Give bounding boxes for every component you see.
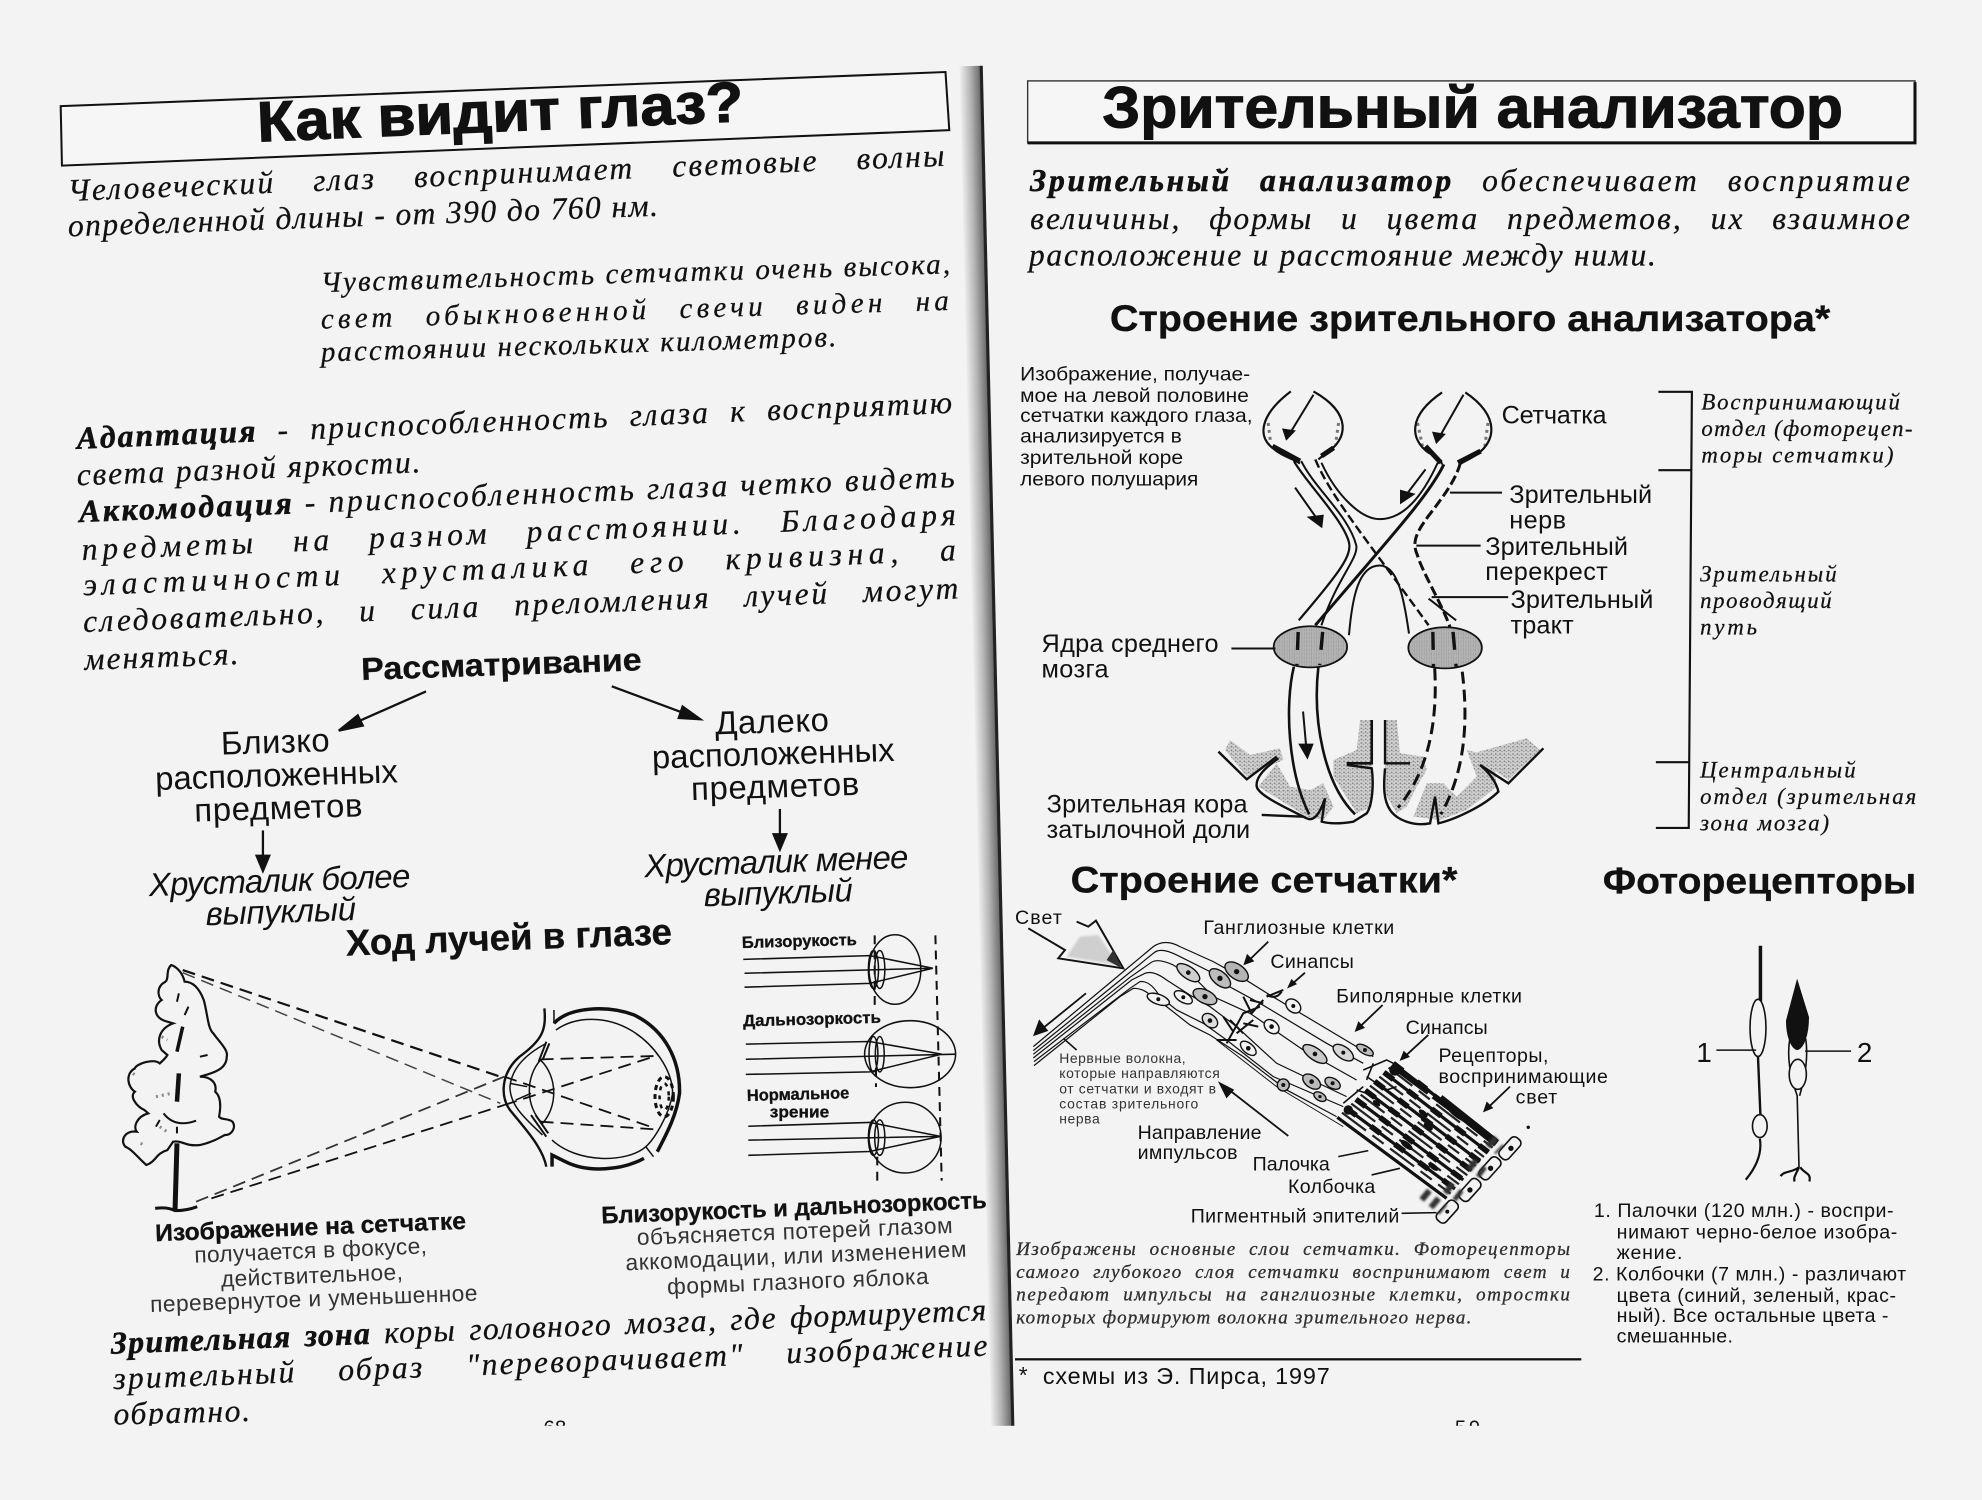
text: lens less convex: Хрусталик менее <box>643 838 909 884</box>
text: near objects <box>155 721 399 829</box>
retina and lens guide lines <box>875 935 942 1181</box>
bottom page edge mask <box>0 1426 1982 1500</box>
labels: optic pathway: Ядра среднего <box>1042 630 1219 658</box>
icon: eye cross section <box>504 1008 680 1169</box>
diagram: rays from tree to eye <box>183 970 655 1202</box>
text block: retinal image: Изображение на сетчатке <box>155 1208 466 1247</box>
caption: retina layers: самого глубокого слоя сетчатки воспринимают свет и <box>1016 1262 1570 1283</box>
text block: adaptation and accommodation: Адаптация - приспособленность глаза к восприятию <box>74 385 953 456</box>
direction arrows <box>1295 469 1426 753</box>
diagram: optic pathway <box>1231 391 1508 814</box>
dark blobs <box>1344 1064 1469 1172</box>
text block: retina sensitivity: свет обыкновенной свечи виден на <box>320 285 949 336</box>
labels: optic pathway <box>1042 401 1653 844</box>
labels: retina: Колбочка <box>1288 1176 1375 1198</box>
leader lines <box>1231 493 1508 648</box>
text block: analyzer definition: Зрительный анализатор обеспечивает восприятие <box>1029 163 1910 198</box>
text block: adaptation and accommodation: эластичности хрусталика его кривизна, а <box>82 532 956 602</box>
labels: optic pathway: Зрительный <box>1511 586 1653 614</box>
labels: retina <box>1015 907 1608 1227</box>
labels: vision types: Близорукость <box>742 931 857 952</box>
text block: retina sensitivity: расстоянии нескольких километров. <box>318 321 837 369</box>
arrow: to near objects <box>339 691 426 731</box>
text: lens more convex: Хрусталик более <box>147 857 411 903</box>
text block: visual cortex: зрительный образ "переворачивает" изображение <box>112 1328 988 1396</box>
lower tracts <box>1289 667 1355 814</box>
heading: retina structure: Строение сетчатки* <box>1071 858 1458 900</box>
labels: rod and cone numbers: 2 <box>1857 1037 1872 1068</box>
text block: visual cortex <box>109 1292 988 1432</box>
text block: retina sensitivity <box>318 248 950 369</box>
footnote: схемы из Э. Пирса, 1997 <box>1043 1363 1330 1389</box>
heading: analyzer structure: Строение зрительного анализатора* <box>1110 298 1831 339</box>
note: left half of retina: анализируется в <box>1020 425 1182 447</box>
caption: retina layers <box>1015 1239 1570 1328</box>
caption: retina layers: Изображены основные слои сетчатки. Фоторецепторы <box>1015 1239 1570 1260</box>
list: photoreceptor descriptions: цвета (синий, зеленый, крас- <box>1617 1285 1896 1307</box>
heading: path of rays: Ход лучей в глазе <box>345 911 673 964</box>
note: left half of retina: зрительной коре <box>1020 447 1183 469</box>
labels: retina: Биполярные клетки <box>1336 985 1522 1007</box>
icon: tree <box>123 965 234 1211</box>
text block: adaptation and accommodation <box>74 385 959 677</box>
labels: retina: которые направляются <box>1059 1065 1220 1081</box>
labels: retina: Направление <box>1138 1122 1262 1144</box>
text: far objects <box>651 701 896 807</box>
footnote rule <box>1015 1358 1581 1360</box>
text: lens less convex: выпуклый <box>703 871 853 913</box>
text block: adaptation and accommodation: следовательно, и сила преломления лучей могут <box>82 570 959 639</box>
text block: myopia and hyperopia explained: формы глазного яблока <box>667 1263 929 1299</box>
labels: retina: нерва <box>1059 1111 1100 1127</box>
text block: visual cortex: обратно. <box>113 1393 250 1432</box>
receptor rods <box>1337 1063 1497 1198</box>
labels: analyzer sections: Зрительный <box>1700 561 1837 586</box>
labels: optic pathway: затылочной доли <box>1047 816 1250 844</box>
labels: vision types: Нормальное <box>747 1084 850 1105</box>
labels: retina: Пигментный эпителий <box>1191 1205 1399 1227</box>
list: photoreceptor descriptions: 2. Колбочки (7 млн.) - различают <box>1593 1263 1906 1285</box>
labels: analyzer sections: Воспринимающий <box>1701 390 1900 415</box>
text block: retinal image: действительное, <box>220 1258 403 1292</box>
labels: analyzer sections: отдел (фоторецеп- <box>1701 416 1912 441</box>
labels: retina: Нервные волокна, <box>1059 1050 1186 1066</box>
text: near objects: предметов <box>194 786 363 829</box>
list: photoreceptor descriptions: смешанные. <box>1617 1325 1733 1347</box>
text block: wavelengths: определенной длины - от 390 до 760 нм. <box>67 188 658 243</box>
text block: adaptation and accommodation: света разной яркости. <box>76 444 421 492</box>
labels: analyzer sections: торы сетчатки) <box>1701 443 1894 468</box>
labels: retina: состав зрительного <box>1059 1096 1199 1112</box>
pigment epithelium <box>1434 1135 1523 1225</box>
labels: rod and cone numbers: 1 <box>1696 1037 1712 1068</box>
labels: retina: Ганглиозные клетки <box>1203 917 1394 939</box>
labels: vision types: Дальнозоркость <box>743 1009 881 1030</box>
text block: visual cortex: Зрительная зона коры головного мозга, где формируется <box>109 1292 987 1361</box>
diagram: visual cortex lobes <box>1218 720 1543 824</box>
labels: retina: Свет <box>1015 907 1062 929</box>
text block: analyzer definition <box>1027 163 1910 272</box>
text block: wavelengths <box>67 138 945 243</box>
list: photoreceptor descriptions <box>1593 1200 1906 1347</box>
text block: wavelengths: Человеческий глаз воспринимает световые волны <box>67 138 945 208</box>
panel: right page <box>1015 76 1916 1440</box>
ganglion and bipolar cells <box>1146 958 1375 1103</box>
labels: retina: Синапсы <box>1270 951 1354 973</box>
labels: retina: импульсов <box>1138 1142 1237 1164</box>
panel: left page <box>61 71 988 1440</box>
eyes <box>1268 423 1488 446</box>
diagram: hyperopia <box>746 1021 956 1088</box>
note: left half of retina <box>1020 363 1253 490</box>
labels: retina: воспринимающие <box>1438 1066 1608 1088</box>
note: left half of retina: мое на левой половине <box>1020 385 1249 407</box>
list: photoreceptor descriptions: ный). Все остальные цвета - <box>1617 1305 1888 1327</box>
diagram: retina layers <box>1028 921 1530 1225</box>
text: lens more convex: выпуклый <box>205 890 357 932</box>
arrows and leaders <box>1040 942 1510 1136</box>
list: photoreceptor descriptions: 1. Палочки (120 млн.) - воспри- <box>1594 1200 1894 1222</box>
labels: retina: Синапсы <box>1406 1017 1488 1039</box>
text block: analyzer definition: расположение и расстояние между ними. <box>1027 237 1656 272</box>
labels: analyzer sections <box>1699 390 1916 835</box>
caption: retina layers: которых формируют волокна зрительного нерва. <box>1016 1307 1471 1328</box>
text block: myopia and hyperopia explained: Близорукость и дальнозоркость <box>601 1187 987 1230</box>
text block: analyzer definition: величины, формы и цвета предметов, их взаимное <box>1030 201 1910 236</box>
text block: retinal image: получается в фокусе, <box>194 1232 427 1268</box>
text block: adaptation and accommodation: меняться. <box>83 636 239 677</box>
labels: rod and cone numbers <box>1696 1037 1872 1068</box>
book spine <box>959 66 1014 1431</box>
labels: optic pathway: Сетчатка <box>1502 401 1608 429</box>
text: near objects: Близко <box>220 721 330 762</box>
nerve fibres <box>1033 942 1373 1057</box>
nuclei <box>1274 626 1347 667</box>
diagram: normal vision <box>748 1102 941 1173</box>
labels: retina: Палочка <box>1253 1153 1330 1175</box>
text block: retina sensitivity: Чувствительность сетчатки очень высока, <box>320 248 950 299</box>
text block: myopia and hyperopia explained: аккомодации, или изменением <box>625 1236 967 1275</box>
title: Как видит глаз <box>61 71 949 166</box>
labels: optic pathway: нерв <box>1509 506 1566 534</box>
labels: retina: Рецепторы, <box>1438 1045 1548 1067</box>
synapse scribbles <box>1217 990 1283 1043</box>
title: Как видит глаз: Как видит глаз? <box>256 71 745 155</box>
labels: analyzer sections: путь <box>1700 615 1757 640</box>
labels: optic pathway: Зрительная кора <box>1047 791 1249 819</box>
page number 68: 68 <box>544 1418 566 1440</box>
text block: retinal image: перевернутое и уменьшенное <box>150 1280 478 1317</box>
diagram: rod and cone <box>1716 946 1851 1182</box>
note: left half of retina: левого полушария <box>1020 468 1198 490</box>
labels: analyzer sections: Центральный <box>1699 757 1856 782</box>
text block: myopia and hyperopia explained <box>601 1187 987 1299</box>
title: Зрительный анализатор: Зрительный анализатор <box>1102 76 1843 141</box>
text: far objects: Далеко <box>715 701 829 741</box>
text: lens more convex <box>147 857 411 932</box>
note: left half of retina: сетчатки каждого глаза, <box>1020 405 1253 427</box>
bracket: analyzer sections <box>1656 392 1692 828</box>
nerves <box>1294 461 1349 620</box>
labels: optic pathway: Зрительный <box>1485 533 1628 561</box>
text: lens less convex <box>643 838 909 913</box>
caption: retina layers: передают импульсы на ганглиозные клетки, отростки <box>1016 1285 1570 1306</box>
text block: retinal image <box>150 1208 478 1317</box>
labels: retina: свет <box>1516 1086 1557 1108</box>
arrow: near down <box>257 830 269 871</box>
heading: photoreceptors: Фоторецепторы <box>1603 860 1916 902</box>
cone <box>1781 981 1810 1182</box>
labels: analyzer sections: проводящий <box>1700 588 1832 613</box>
text block: adaptation and accommodation: Аккомодация - приспособленность глаза четко видеть <box>77 459 955 529</box>
text block: adaptation and accommodation: предметы на разном расстоянии. Благодаря <box>81 497 956 567</box>
diagram: myopia <box>743 935 933 1004</box>
labels: optic pathway: перекрест <box>1485 558 1608 586</box>
arrow: to far objects <box>612 686 700 719</box>
labels: retina: от сетчатки и входят в <box>1059 1080 1216 1096</box>
footnote: * <box>1019 1362 1028 1388</box>
text: near objects: расположенных <box>155 752 399 797</box>
labels: optic pathway: тракт <box>1511 611 1574 639</box>
pointer lines <box>1716 1050 1851 1051</box>
labels: vision types <box>742 931 881 1121</box>
list: photoreceptor descriptions: нимают черно-белое изобра- <box>1617 1222 1897 1244</box>
labels: analyzer sections: отдел (зрительная <box>1700 784 1916 809</box>
labels: optic pathway: мозга <box>1042 656 1109 684</box>
labels: vision types: зрение <box>770 1103 829 1121</box>
page number 59: 59 <box>1455 1418 1480 1440</box>
note: left half of retina: Изображение, получае- <box>1020 363 1250 385</box>
rod <box>1746 946 1767 1180</box>
text: far objects: расположенных <box>651 731 896 776</box>
labels: analyzer sections: зона мозга) <box>1699 810 1829 835</box>
synapse network <box>1343 1060 1400 1103</box>
light arrow <box>1028 921 1123 968</box>
labels: optic pathway: Зрительный <box>1509 481 1652 509</box>
arrow: far down <box>774 809 786 849</box>
heading: Рассматривание: Рассматривание <box>361 641 642 687</box>
list: photoreceptor descriptions: жение. <box>1617 1242 1682 1264</box>
flow diagram: viewing near and far <box>147 641 909 932</box>
text block: myopia and hyperopia explained: объясняется потерей глазом <box>636 1212 953 1250</box>
text: far objects: предметов <box>690 765 860 807</box>
